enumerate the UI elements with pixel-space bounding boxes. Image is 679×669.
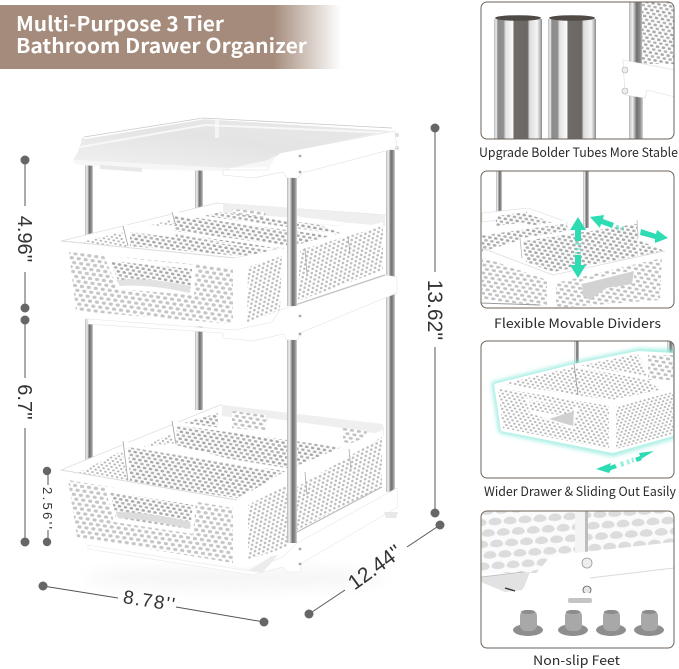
icon: four rubber feet [513,610,664,636]
dimension: 12.44 inch: 12.44'' [344,541,406,595]
title banner [0,5,341,69]
dimension: 2.56 inch: 2.56'' [40,487,55,529]
icon: steel tubes [494,15,596,140]
panel: bolder tubes [481,0,675,140]
panel: wider drawer [481,341,675,478]
icon: slide arrow [596,451,654,473]
product: 3 tier organizer [61,118,399,590]
lower dividers [78,421,352,498]
back and left posts [85,150,395,545]
bottom shelf base [88,487,398,575]
upper basket side [235,222,385,330]
basket with dividers [481,208,665,308]
dimension: 6.7 inch [13,316,35,546]
lower handle [105,487,196,534]
teal glow [494,351,675,454]
upper drawer basket [61,203,385,330]
caption: feet: Non-slip Feet [533,650,620,669]
title banner: Bathroom Drawer Organizer [16,30,307,59]
title banner: Multi-Purpose 3 Tier [16,8,224,37]
floor shadow [85,566,385,590]
white base bracket [481,542,674,603]
dimension: 8.78 inch: 8.78'' [122,587,176,616]
dimension: 6.7 inch: 6.7'' [13,384,35,420]
panel: movable dividers [481,171,674,308]
icon: teal arrows [570,215,668,278]
upper dividers [78,212,335,256]
lower drawer basket [61,405,383,568]
dimension: 13.62 inch [423,124,446,518]
middle shelf rail [88,275,397,341]
dimension: 4.96 inch [13,156,35,312]
dimension: 4.96 inch: 4.96'' [13,216,35,262]
sliding basket [494,351,673,453]
upper handle [104,256,196,295]
panel: non-slip feet [481,511,675,648]
caption: dividers: Flexible Movable Dividers [494,313,661,332]
lower basket front [61,470,248,568]
dimension: 13.62 inch: 13.62'' [423,280,446,340]
dimension: 12.44 inch [304,520,444,618]
front right post [287,178,297,543]
lower basket side [237,430,383,568]
dimension: 8.78 inch [38,582,268,626]
top shelf [73,118,399,178]
upper basket front [61,241,247,330]
post, mesh and bracket [622,0,675,140]
dimension: 2.56 inch [40,467,55,546]
